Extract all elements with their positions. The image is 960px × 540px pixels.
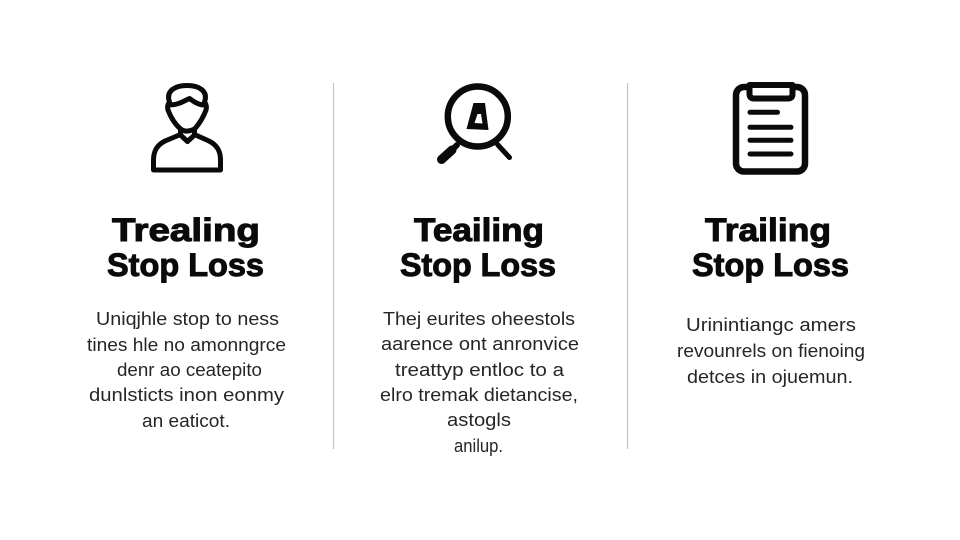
text block: right column: [677, 315, 865, 387]
text block: middle column: astogls: [447, 410, 511, 430]
text block: middle column: aarence ont anronvice: [381, 334, 579, 354]
text block: middle column: [380, 309, 579, 456]
heading: middle column: Teailing: [414, 212, 544, 248]
heading: middle column: [400, 212, 556, 283]
text block: left column: [87, 309, 286, 431]
text block: middle column: treattyp entloc to a: [395, 360, 565, 380]
heading: left column: Stop Loss: [107, 247, 264, 283]
text block: left column: denr ao ceatepito: [117, 360, 262, 380]
icon: magnifying glass: [442, 86, 510, 160]
text block: left column: Uniqjhle stop to ness: [96, 309, 279, 329]
icon: clipboard document: [736, 85, 805, 172]
text block: left column: an eaticot.: [142, 411, 230, 431]
text block: middle column: elro tremak dietancise,: [380, 385, 578, 405]
text block: left column: tines hle no amonngrce: [87, 335, 286, 355]
heading: right column: Trailing: [705, 212, 831, 248]
text block: middle column: Thej eurites oheestols: [383, 309, 575, 329]
heading: middle column: Stop Loss: [400, 247, 556, 283]
icon: person: [154, 86, 220, 170]
text block: right column: Urinintiangc amers: [686, 315, 856, 335]
text block: right column: detces in ojuemun.: [687, 367, 853, 387]
text block: right column: revounrels on fienoing: [677, 341, 865, 361]
heading: left column: [107, 212, 264, 283]
heading: right column: Stop Loss: [692, 247, 849, 283]
panel: middle column: [380, 86, 579, 456]
panel: left column: [87, 86, 286, 431]
heading: left column: Trealing: [112, 212, 260, 248]
panel: right column: [677, 85, 865, 387]
text block: left column: dunlsticts inon eonmy: [89, 385, 284, 405]
text block: middle column: anilup.: [454, 436, 503, 456]
heading: right column: [692, 212, 849, 283]
